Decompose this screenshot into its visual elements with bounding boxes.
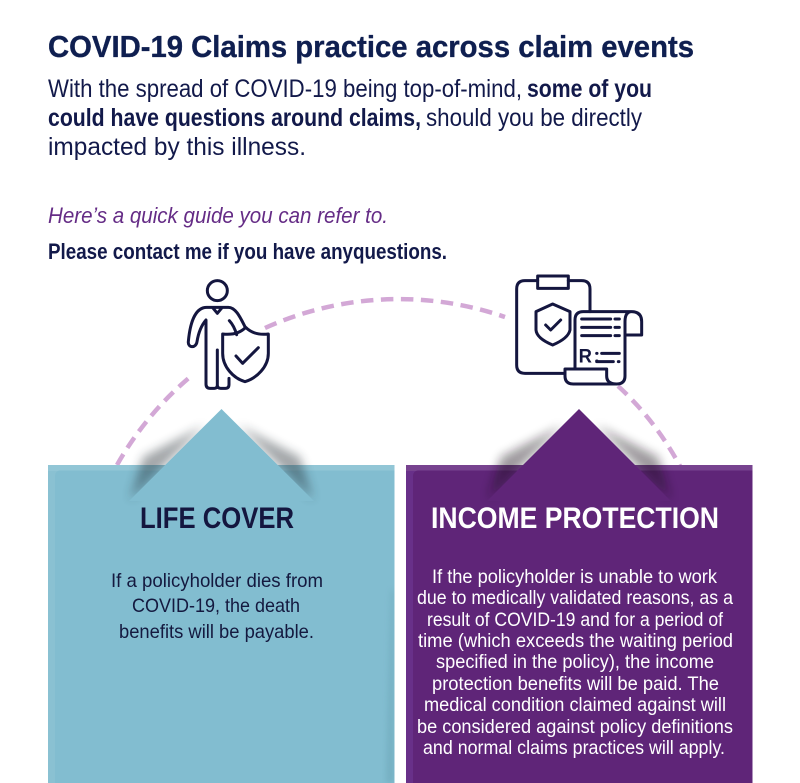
text: income protection description: protection benefits will be paid. The [432, 674, 719, 695]
text: life cover description: benefits will be payable. [119, 621, 314, 643]
panel background: life cover [48, 465, 400, 783]
text: income protection description: specified in the policy), the income [436, 652, 714, 673]
text: income protection description: time (which exceeds the waiting period [418, 631, 733, 652]
text: income protection description: and normal claims practices will apply. [423, 738, 725, 759]
text: life cover description [111, 570, 323, 643]
intro text block: impacted by this illness. [48, 133, 306, 161]
icon: clipboard and prescription scroll [517, 276, 642, 384]
italic guide line: Here’s a quick guide you can refer to. [48, 203, 388, 228]
title: COVID-19 Claims practice across claim events [48, 29, 694, 64]
text: life cover description: COVID-19, the death [132, 595, 300, 617]
text: income protection description: due to medically validated reasons, as a [417, 588, 733, 609]
icon: person with shield [188, 281, 268, 388]
heading: life cover: LIFE COVER [140, 502, 294, 535]
text: life cover description: If a policyholder dies from [111, 570, 323, 592]
heading: income protection: INCOME PROTECTION [431, 502, 719, 535]
text: income protection description [417, 567, 733, 759]
intro text block: With the spread of COVID-19 being top-of-mind, [48, 75, 522, 103]
text: income protection description: result of COVID-19 and for a period of [427, 610, 724, 631]
contact line: Please contact me if you have anyquestions. [48, 239, 447, 264]
intro text block [48, 75, 652, 161]
intro text block: some of you [527, 75, 652, 103]
panel background: income protection [406, 465, 758, 783]
dashed arc connecting the panels [117, 299, 680, 466]
triangle tab: life cover [129, 409, 314, 501]
panel: income protection [406, 409, 758, 783]
text: income protection description: be considered against policy definitions [417, 717, 733, 738]
intro text block: could have questions around claims, [48, 104, 421, 132]
panel: life cover [48, 409, 400, 783]
intro text block: should you be directly [426, 104, 642, 132]
text: income protection description: If the policyholder is unable to work [432, 567, 717, 588]
text: income protection description: medical condition claimed against will [424, 695, 726, 716]
triangle tab: income protection [487, 409, 671, 501]
icon: clipboard and prescription scroll: R [579, 347, 592, 368]
